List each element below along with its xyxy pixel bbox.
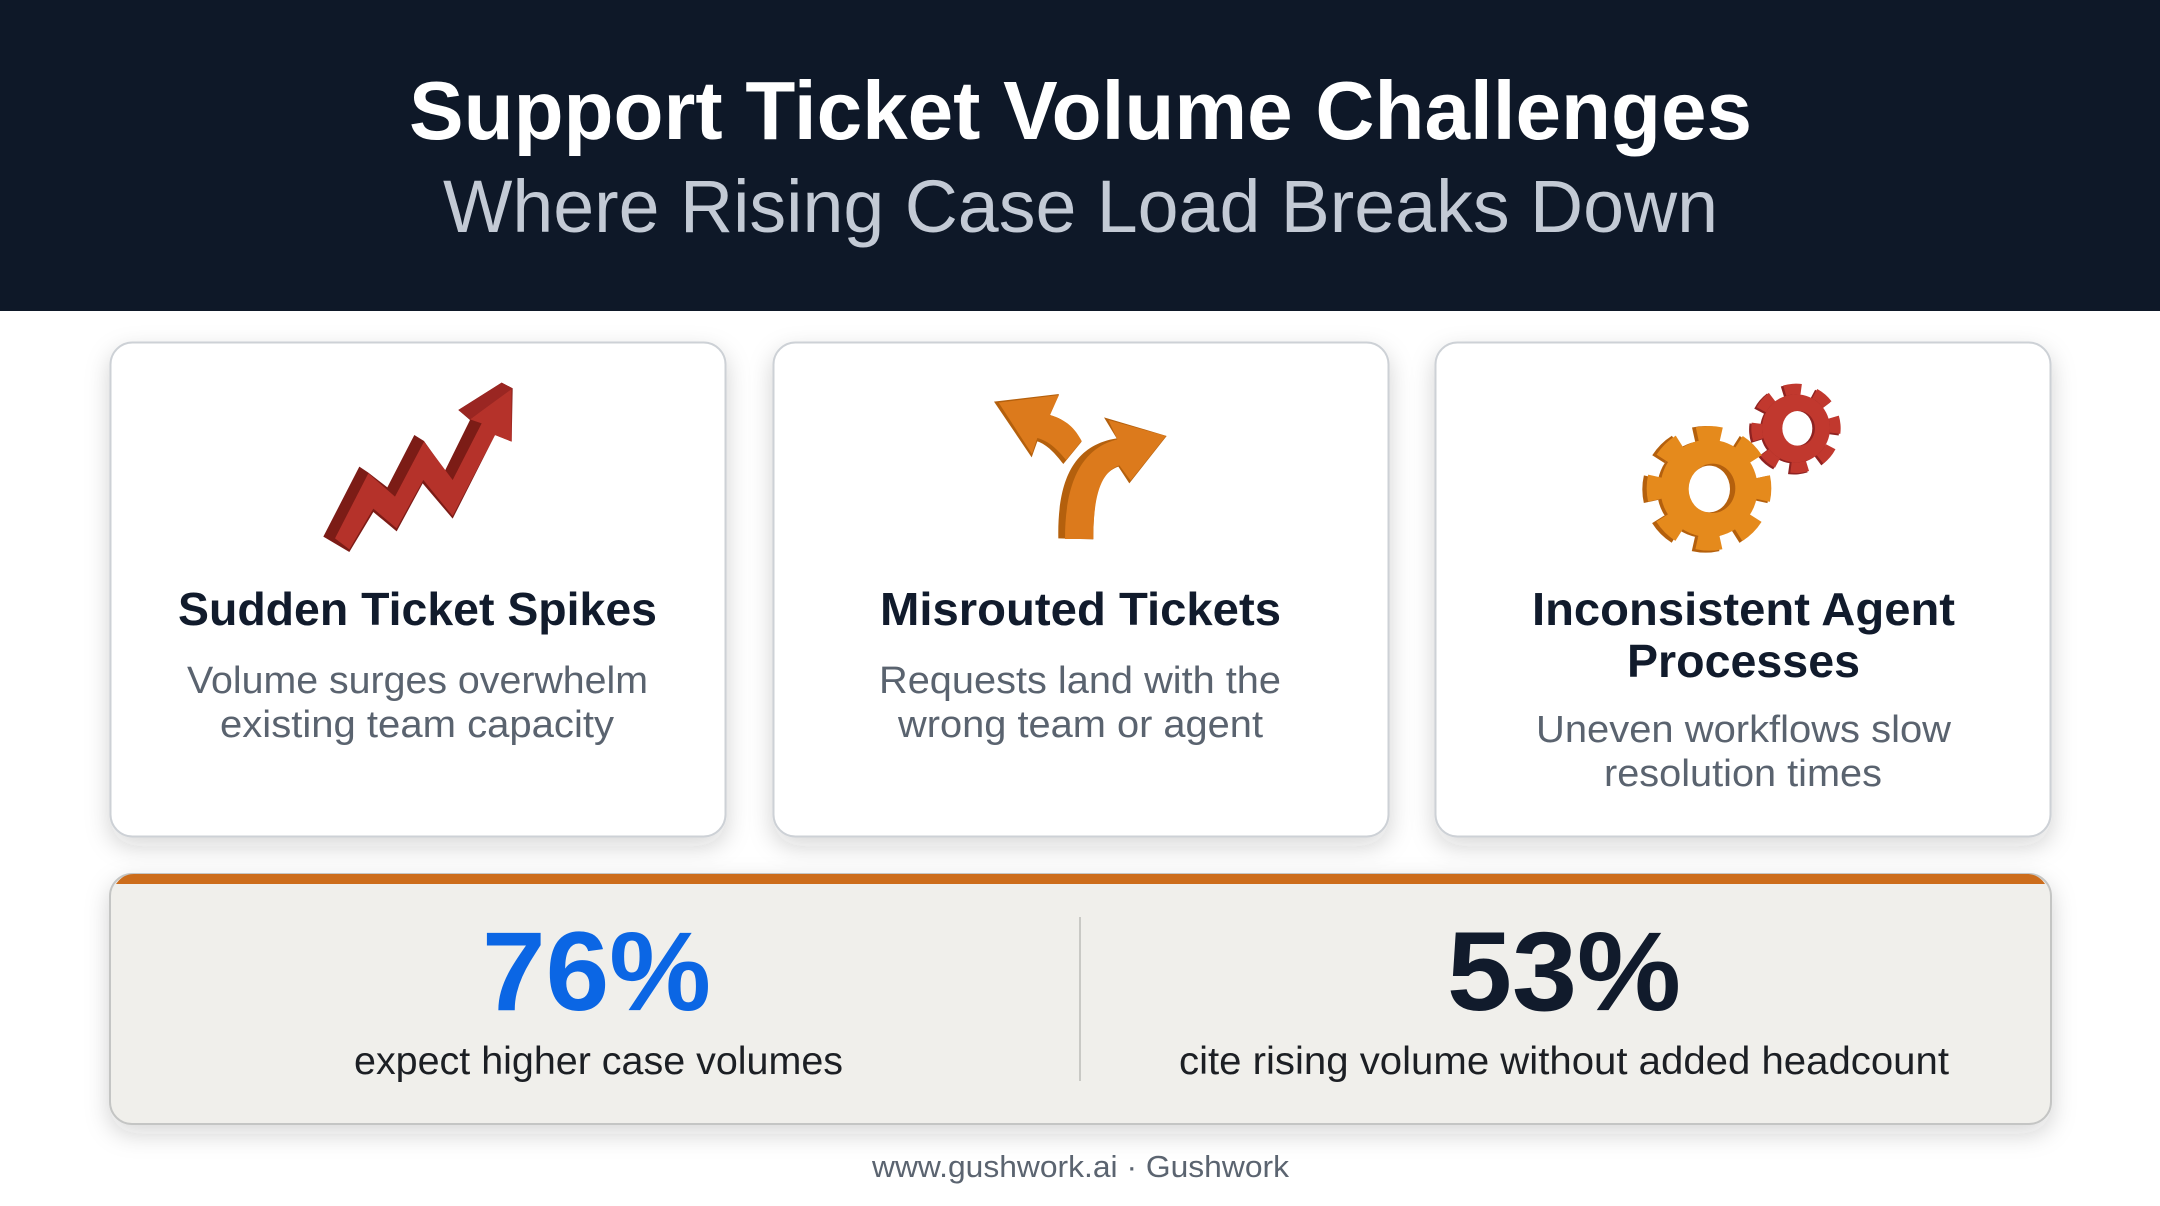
subtitle: Where Rising Case Load Breaks Down (443, 165, 1718, 248)
panel: inconsistent agent processes (1436, 342, 2050, 836)
panel: misrouted tickets (774, 342, 1388, 836)
card description: wrong team or agent (897, 704, 1263, 746)
icon: rising red zigzag arrow (323, 383, 513, 552)
panel: sudden ticket spikes (110, 342, 726, 836)
card heading: Sudden Ticket Spikes (178, 583, 657, 635)
card description: resolution times (1604, 753, 1882, 795)
card description: Volume surges overwhelm (187, 660, 648, 702)
card description (879, 660, 1281, 746)
footer source line: www.gushwork.ai · Gushwork (871, 1149, 1290, 1184)
statistic: 76 percent (354, 909, 843, 1083)
card heading: Inconsistent Agent (1532, 583, 1955, 635)
panel: key statistics (110, 874, 2051, 1124)
card heading: Processes (1627, 635, 1860, 687)
card description: Requests land with the (879, 660, 1281, 702)
card description: Uneven workflows slow (1536, 709, 1952, 751)
title: Support Ticket Volume Challenges (409, 64, 1752, 157)
card description (1536, 709, 1952, 795)
card description (187, 660, 648, 746)
statistic: 53 percent: cite rising volume without added headcount (1179, 1040, 1949, 1083)
statistic: 53 percent (1179, 909, 1949, 1083)
card description: existing team capacity (220, 704, 614, 746)
icon: orange and red gears (1650, 386, 1839, 545)
card heading: Misrouted Tickets (880, 583, 1281, 635)
statistic: 53 percent: 53% (1447, 909, 1681, 1034)
header banner (0, 0, 2160, 311)
card heading (1532, 583, 1955, 687)
statistic: 76 percent: expect higher case volumes (354, 1040, 843, 1083)
statistic: 76 percent: 76% (482, 909, 711, 1034)
icon: diverging orange arrows (994, 394, 1167, 539)
